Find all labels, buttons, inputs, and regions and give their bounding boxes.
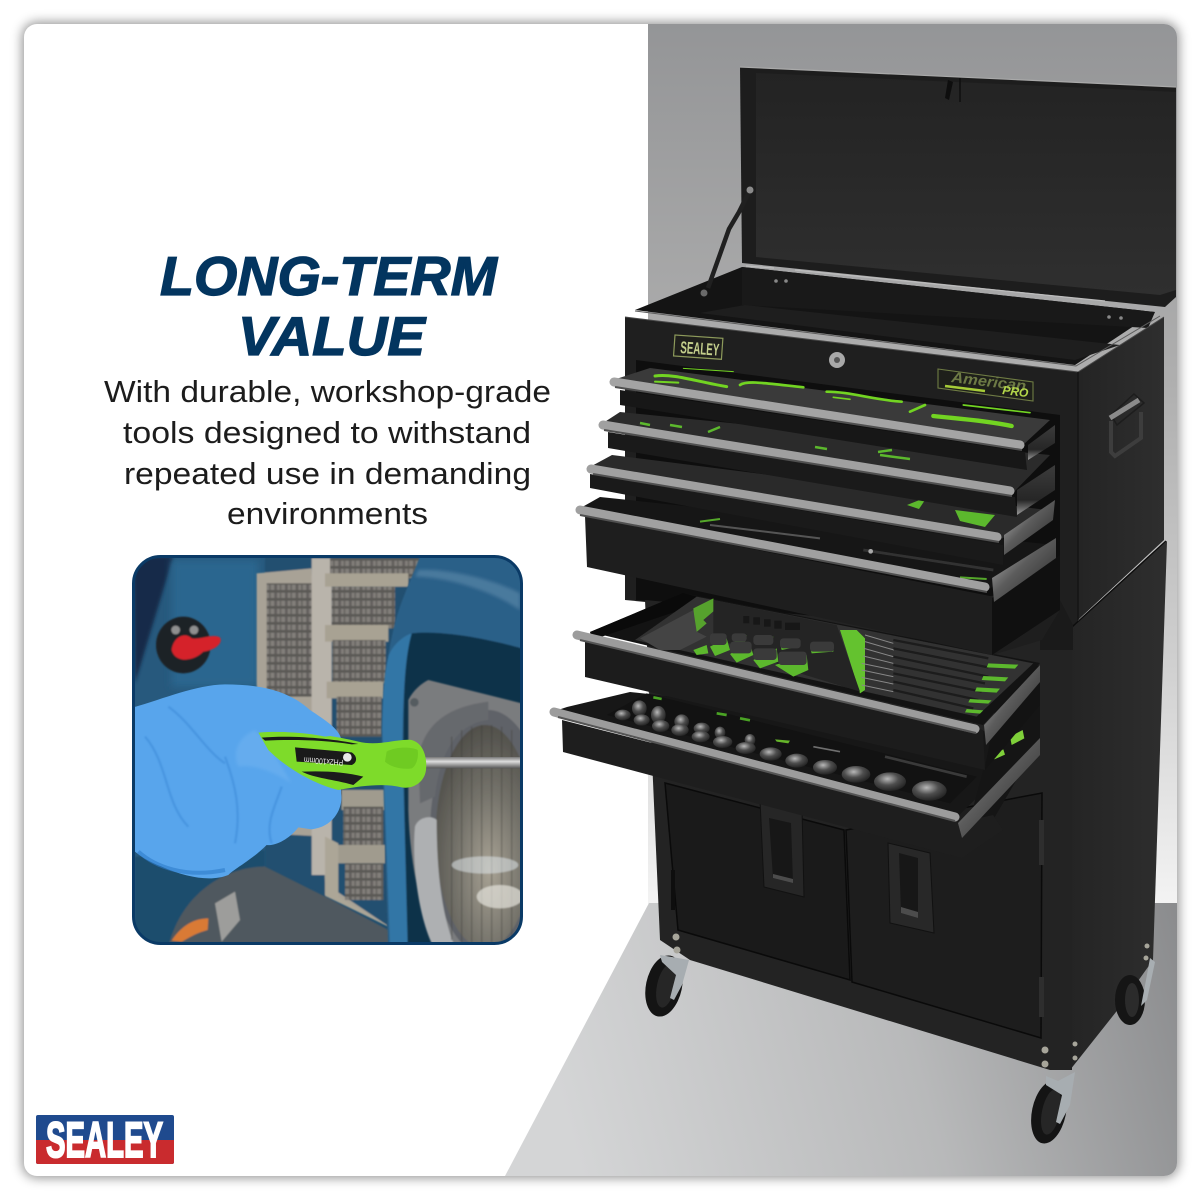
- rail: [1017, 465, 1055, 515]
- rail: [992, 538, 1056, 602]
- photo: screwdriver handle: [258, 732, 426, 790]
- text block: description: With durable, workshop-grade: [104, 374, 551, 409]
- photo background: dark jacket corner: [133, 557, 173, 683]
- key lock: [829, 352, 845, 368]
- photo background: lower bumper and orange cable: [135, 850, 388, 947]
- rail: [1004, 500, 1055, 555]
- text block: description: repeated use in demanding: [124, 456, 531, 491]
- cabinet doors: [665, 783, 850, 980]
- text block: description: [104, 374, 551, 531]
- drawer 4 tools: [700, 519, 993, 579]
- drawer 6: sockets: [552, 692, 1040, 858]
- drawer 4: [577, 497, 1060, 655]
- drawer 3 foam accents: [907, 497, 995, 527]
- american pro badge: American: [949, 369, 1027, 395]
- photo background: radiator grille: [257, 557, 425, 947]
- photo background: red switch: [156, 617, 221, 673]
- hinges: [1039, 820, 1044, 865]
- top chest tray interior: [635, 267, 1155, 365]
- text block: description: environments: [227, 496, 428, 531]
- rail: [984, 665, 1040, 745]
- door handles: [760, 800, 804, 897]
- heading: long-term value: LONG-TERM: [160, 245, 498, 307]
- logo: sealey: [36, 1112, 174, 1168]
- american pro badge: [938, 369, 1033, 401]
- drawer 5: spanners and sockets foam: [577, 593, 1040, 770]
- drawer 1 green tool cut-outs: [655, 368, 1030, 426]
- american pro badge: PRO: [1002, 383, 1030, 400]
- sealey badge: [674, 335, 723, 360]
- rail: [958, 738, 1040, 838]
- photo background: blue fender: [382, 557, 522, 947]
- sealey badge: SEALEY: [680, 338, 720, 360]
- heading: long-term value: [160, 245, 498, 367]
- open lid: [740, 67, 1176, 307]
- heading: long-term value: VALUE: [238, 305, 427, 367]
- drawer 3: [588, 455, 1055, 565]
- bolts: [672, 934, 1150, 1068]
- photo: headlamp: [408, 679, 520, 942]
- logo: sealey: SEALEY: [46, 1112, 163, 1168]
- lower cabinet: [645, 541, 1167, 1070]
- product: tool chest cabinet: [552, 67, 1176, 1147]
- caster: back right: [1115, 958, 1155, 1025]
- photo frame: [134, 556, 522, 944]
- photo: screwdriver shaft: [425, 757, 523, 768]
- handle: [603, 425, 1010, 491]
- lid stay arm: [700, 186, 754, 296]
- text block: description: tools designed to withstand: [123, 415, 531, 450]
- handle: [580, 510, 985, 587]
- drawer 1: [610, 368, 1055, 470]
- caster: front right: [1026, 1072, 1075, 1147]
- handle: [591, 469, 997, 537]
- photo: blue nitrile glove: [133, 684, 341, 878]
- top chest body: [625, 311, 1164, 640]
- rail: [1028, 425, 1055, 460]
- drawer 2: [600, 412, 1055, 517]
- photo: fingers over handle: [272, 732, 340, 737]
- foam insert: [635, 597, 1033, 717]
- side carry handle: [1110, 394, 1144, 456]
- photo: gloved hand using screwdriver on headlamp: [132, 553, 547, 957]
- handle: [554, 712, 955, 817]
- handle: [577, 635, 975, 729]
- caster: front left: [640, 952, 689, 1020]
- handle: [614, 382, 1020, 445]
- photo: screwdriver handle: PH2x100mm: [303, 755, 343, 768]
- socket set: [607, 693, 1024, 803]
- background: studio wall and floor: [505, 24, 1177, 1176]
